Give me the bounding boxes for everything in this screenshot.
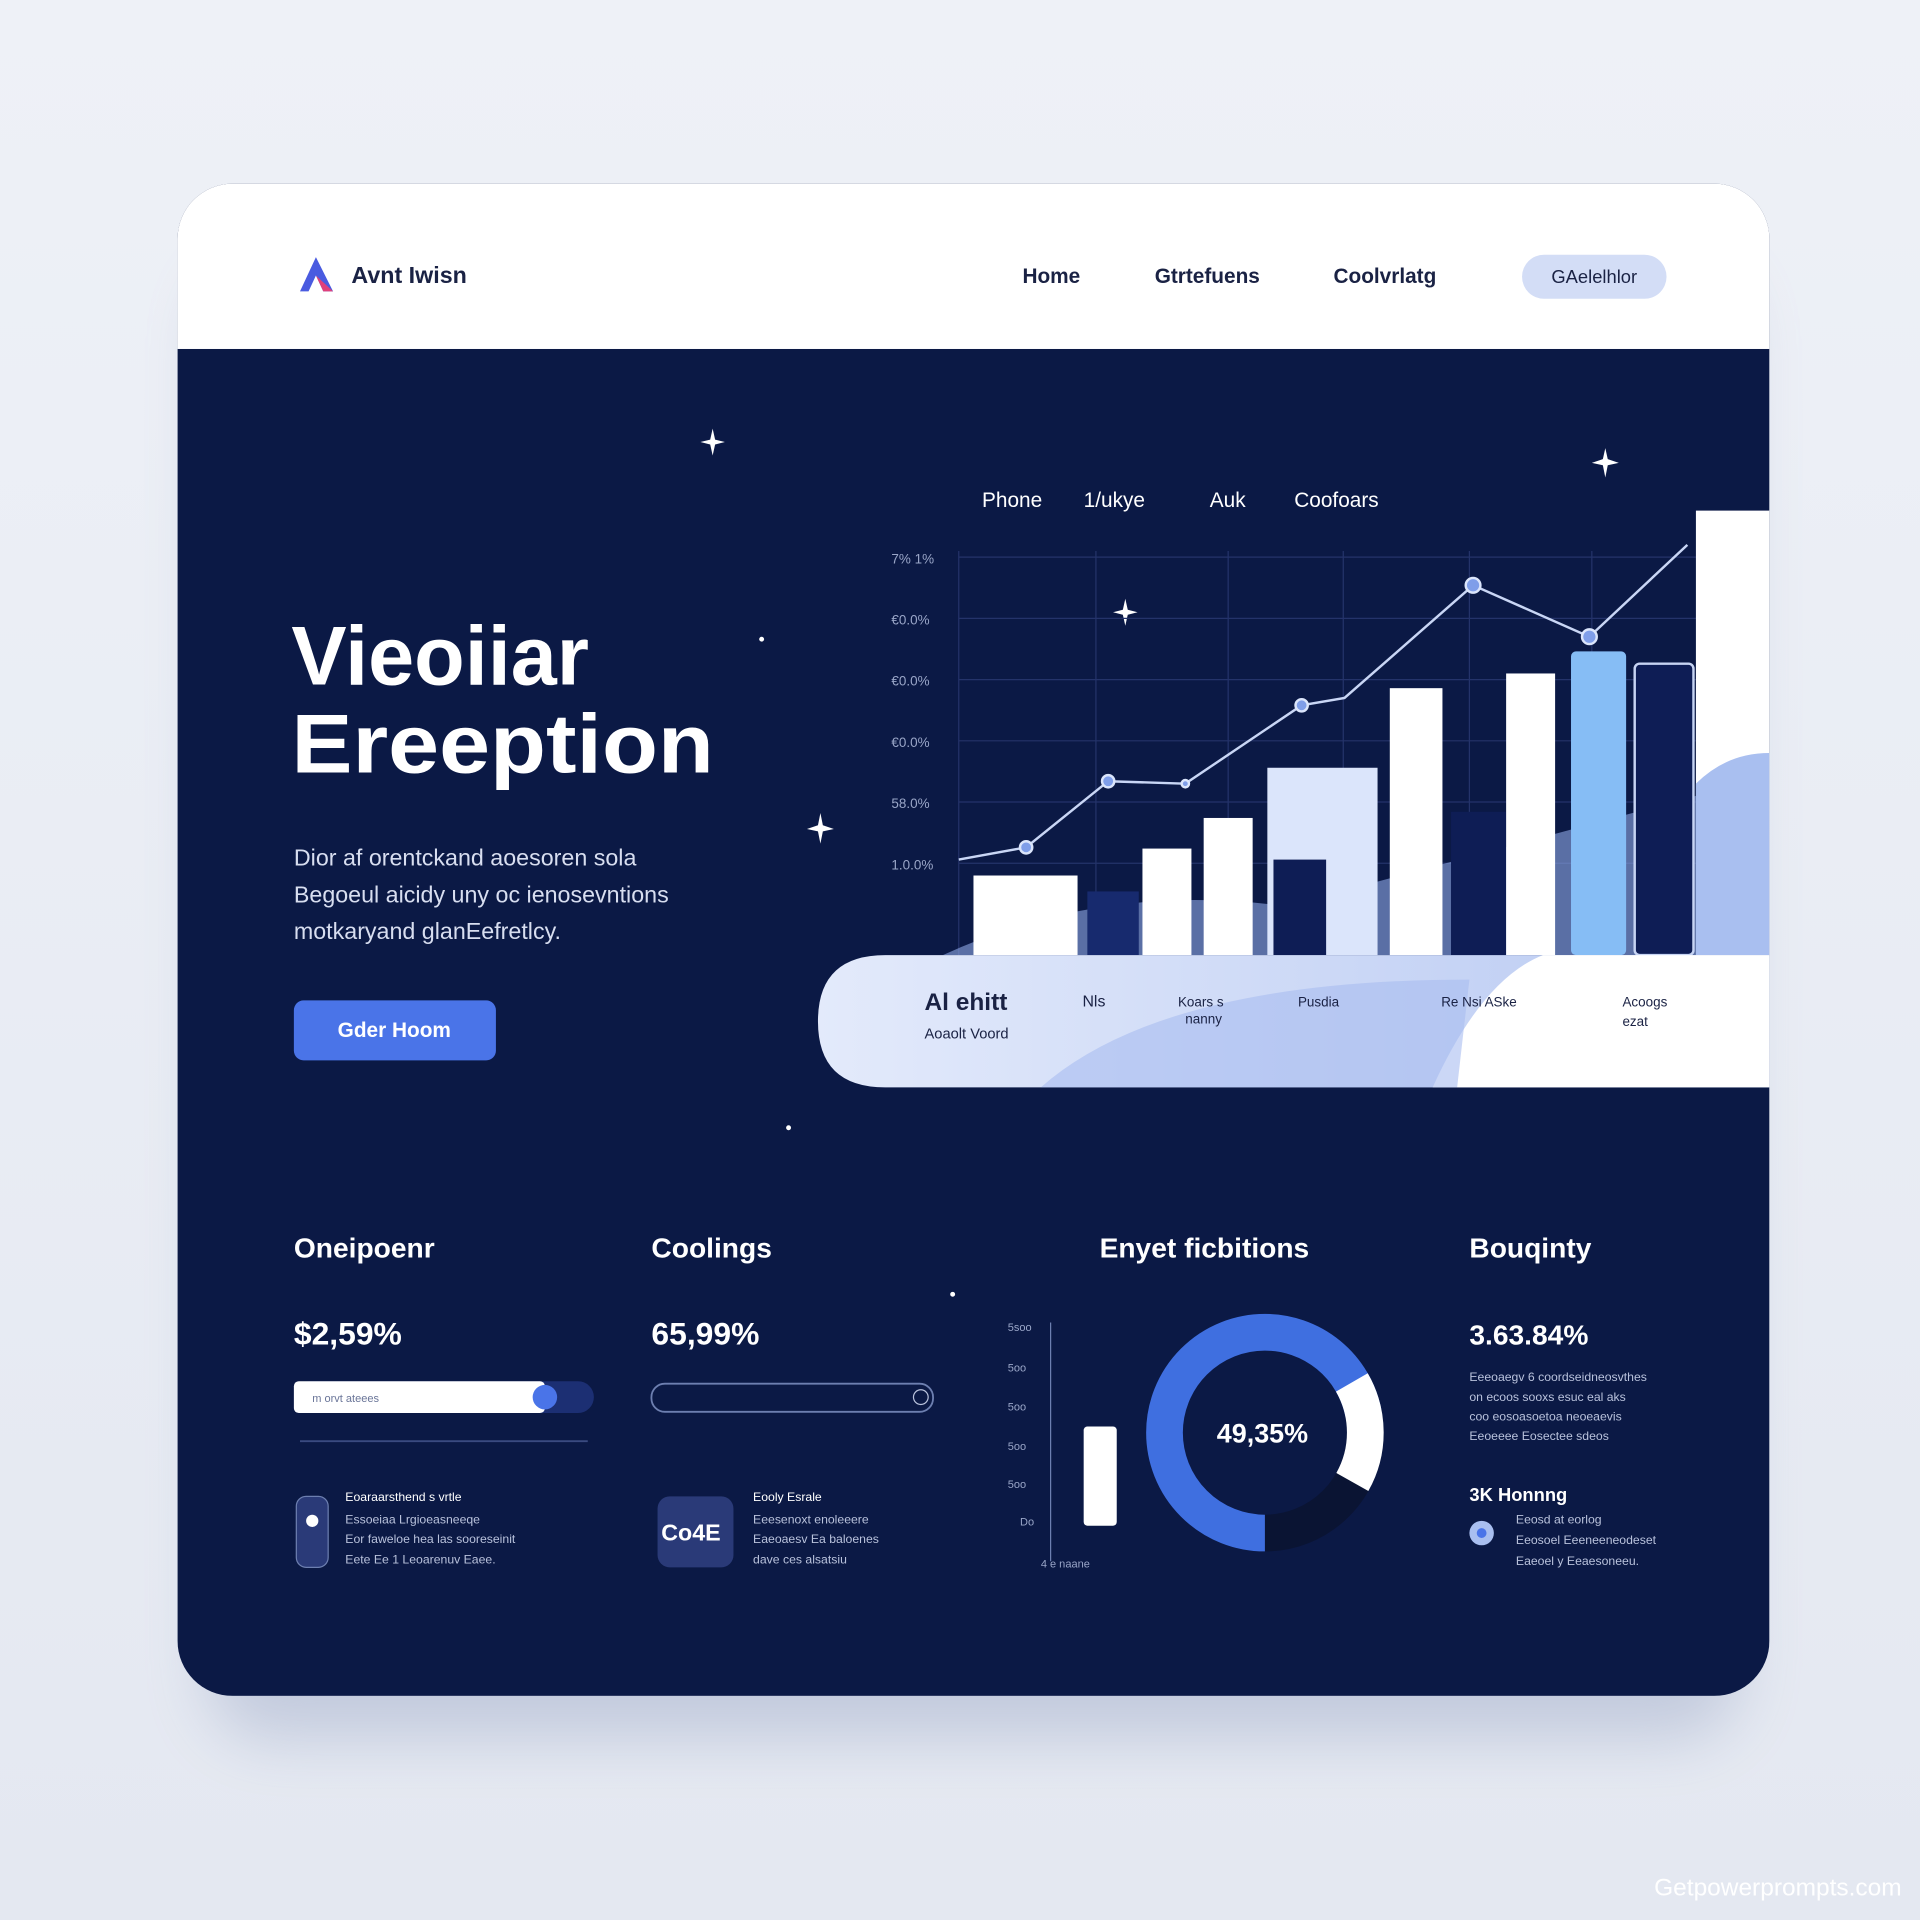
hero paragraph: Begoeul aicidy uny oc ienosevntions — [294, 881, 669, 907]
chart footer pill: Koars s — [1178, 995, 1224, 1010]
stat: Enyet ficbitions donut: 5oo — [1008, 1441, 1026, 1453]
sparkles — [700, 429, 1619, 1297]
chart legend — [984, 492, 1378, 512]
stat: Enyet ficbitions donut: 5soo — [1008, 1322, 1032, 1334]
stat: Oneipoenr: Oneipoenr — [294, 1233, 435, 1264]
hero paragraph — [294, 845, 669, 944]
stat: Oneipoenr: Eete Ee 1 Leoarenuv Eaee. — [345, 1553, 496, 1567]
CTA button: Gder Hoom — [338, 1019, 451, 1042]
nav links: Gtrtefuens — [1155, 265, 1260, 288]
header bar — [178, 184, 1769, 349]
stat: Bouqinty: Eeosoel Eeeneeneodeset — [1516, 1533, 1657, 1547]
stat: Enyet ficbitions donut: 5oo — [1008, 1479, 1026, 1491]
stat: Bouqinty: Eeosd at eorlog — [1516, 1512, 1602, 1526]
hero paragraph: Dior af orentckand aoesoren sola — [294, 845, 636, 871]
stat: Oneipoenr: $2,59% — [294, 1315, 402, 1351]
stat: Coolings: Coolings — [651, 1233, 772, 1264]
stat: Bouqinty — [1469, 1233, 1657, 1568]
stat: Oneipoenr: Eoaraarsthend s vrtle — [345, 1490, 462, 1504]
bar chart: €0.0% — [891, 674, 930, 689]
stat: Coolings: Eooly Esrale — [753, 1490, 822, 1504]
logo — [300, 257, 467, 291]
stat: Bouqinty: 3.63.84% — [1469, 1319, 1588, 1350]
stat: Coolings: dave ces alsatsiu — [753, 1553, 847, 1567]
bar chart: €0.0% — [891, 735, 930, 750]
stat: Bouqinty: Eeoeeee Eosectee sdeos — [1469, 1429, 1609, 1443]
stat: Enyet ficbitions donut: 4 e naane — [1041, 1558, 1090, 1570]
chart legend: Phone — [982, 489, 1042, 512]
stat: Enyet ficbitions donut: Do — [1020, 1517, 1034, 1529]
bar chart — [891, 511, 1769, 955]
bar chart: 58.0% — [891, 796, 930, 811]
stat: Enyet ficbitions donut: 5oo — [1008, 1402, 1026, 1414]
stat: Enyet ficbitions donut: Enyet ficbitions — [1100, 1233, 1309, 1264]
chart footer pill: Pusdia — [1298, 995, 1340, 1010]
chart footer pill: Aoaolt Voord — [924, 1026, 1009, 1042]
nav button: GAelelhlor — [1551, 266, 1637, 287]
stat: Bouqinty: Bouqinty — [1469, 1233, 1592, 1264]
stat: Oneipoenr: Eor faweloe hea las sooreseinit — [345, 1532, 516, 1546]
stat: Oneipoenr: Essoeiaa Lrgioeasneeqe — [345, 1512, 480, 1526]
chart legend: Auk — [1210, 489, 1246, 512]
stat: Bouqinty: Eeeoaegv 6 coordseidneosvthes — [1469, 1370, 1647, 1384]
stat: Enyet ficbitions donut — [1008, 1233, 1402, 1570]
chart footer pill: Nls — [1082, 994, 1105, 1011]
hero paragraph: motkaryand glanEefretlcy. — [294, 918, 561, 944]
stat: Oneipoenr: m orvt ateees — [312, 1393, 379, 1405]
stat: Oneipoenr — [294, 1233, 594, 1567]
stat: Coolings — [651, 1233, 933, 1567]
chart footer pill: Al ehitt — [924, 989, 1007, 1016]
chart footer pill: ezat — [1622, 1014, 1648, 1029]
stat: Enyet ficbitions donut: 49,35% — [1217, 1418, 1308, 1448]
nav links: Home — [1022, 265, 1080, 288]
stat: Bouqinty: Eaeoel y Eeaesoneeu. — [1516, 1554, 1639, 1568]
chart footer pill: nanny — [1185, 1012, 1222, 1027]
chart legend: 1/ukye — [1084, 489, 1145, 512]
chart footer pill: Re Nsi ASke — [1441, 995, 1517, 1010]
hero title — [291, 609, 714, 791]
hero title: Vieoiiar — [291, 609, 589, 702]
card — [178, 184, 1769, 1696]
stat: Coolings: Co4E — [661, 1519, 721, 1545]
watermark: Getpowerprompts.com — [1654, 1875, 1902, 1902]
bar chart: 7% 1% — [891, 551, 934, 566]
stat: Coolings: Eeesenoxt enoleeere — [753, 1512, 869, 1526]
logo: Avnt Iwisn — [351, 262, 467, 288]
chart footer pill — [818, 955, 1769, 1087]
stat: Coolings: Eaeoaesv Ea baloenes — [753, 1532, 879, 1546]
hero title: Ereeption — [291, 698, 714, 791]
CTA button — [294, 1000, 496, 1060]
stat: Bouqinty: 3K Honnng — [1469, 1484, 1567, 1505]
stat: Coolings: 65,99% — [651, 1315, 759, 1351]
stat: Bouqinty: on ecoos sooxs esuc eal aks — [1469, 1390, 1626, 1404]
bar chart: 1.0.0% — [891, 857, 933, 872]
nav button — [1522, 255, 1667, 299]
bar chart: €0.0% — [891, 612, 930, 627]
chart footer pill: Acoogs — [1622, 995, 1668, 1010]
stat: Enyet ficbitions donut: 5oo — [1008, 1362, 1026, 1374]
nav links: Coolvrlatg — [1333, 265, 1436, 288]
stat: Bouqinty: coo eosoasoetoa neoeaevis — [1469, 1409, 1622, 1423]
nav links — [1024, 268, 1435, 288]
chart legend: Coofoars — [1294, 489, 1379, 512]
